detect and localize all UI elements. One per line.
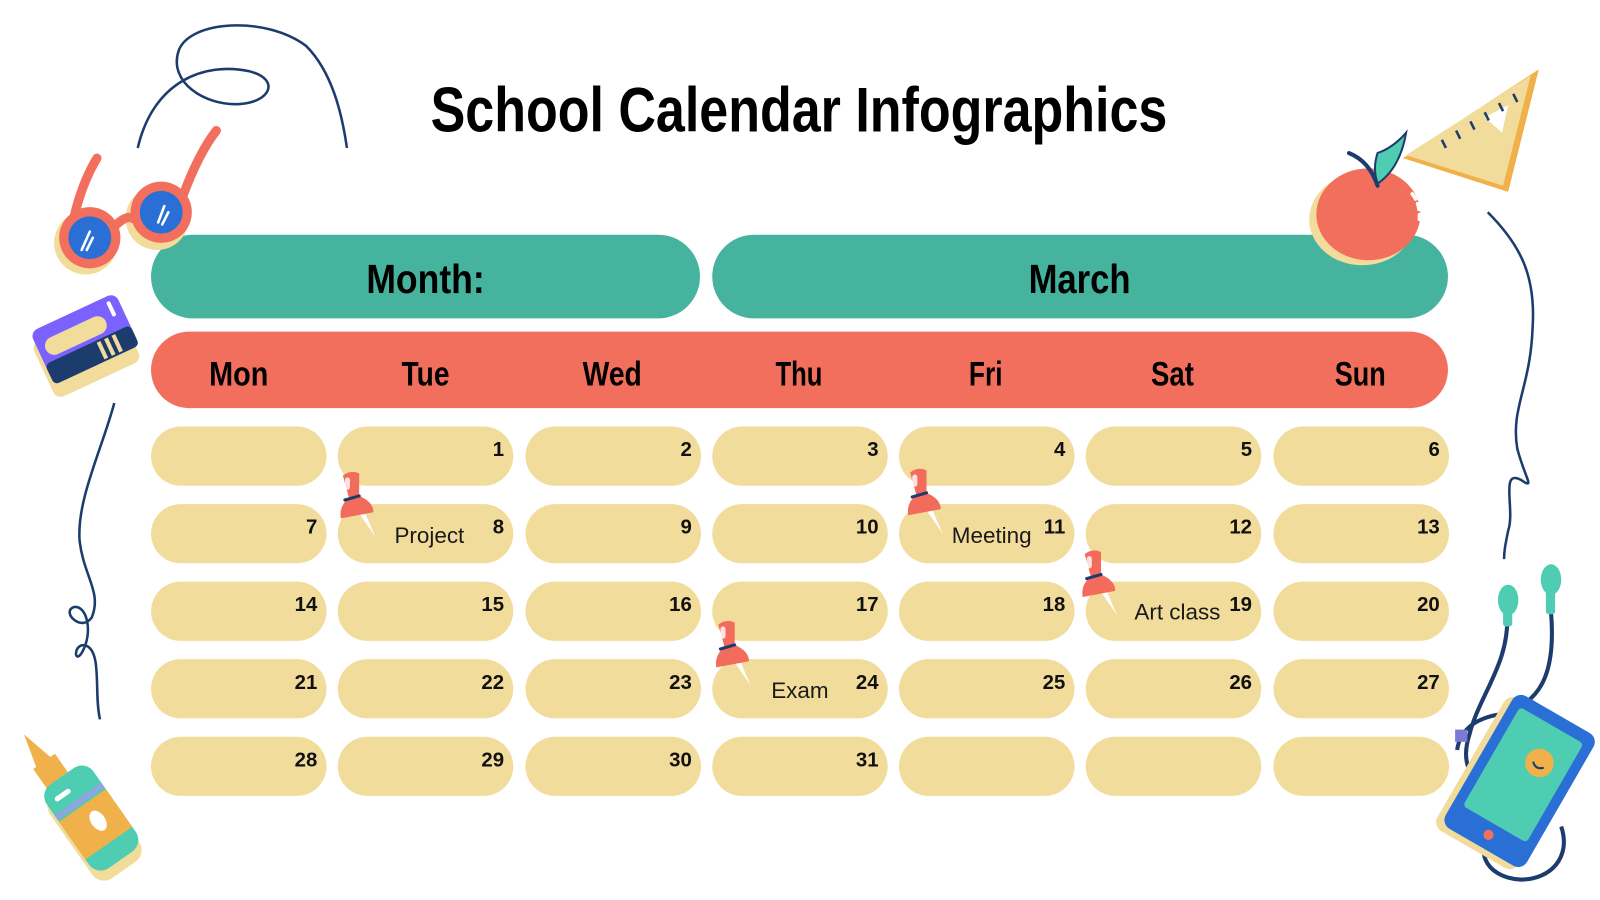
decoration: right curly line (1488, 212, 1533, 559)
weekday header bar: Wed (583, 356, 642, 394)
month name bar (712, 235, 1448, 318)
calendar grid: 29 (481, 749, 504, 771)
calendar grid: 12 (1229, 517, 1252, 539)
month name bar: March (1029, 256, 1131, 302)
month label bar: Month: (366, 256, 485, 302)
calendar grid: 22 (481, 672, 504, 694)
event: Art class: Art class (1134, 599, 1220, 624)
weekday header bar: Mon (209, 356, 268, 394)
calendar grid: 19 (1229, 594, 1252, 616)
calendar grid: 16 (669, 594, 692, 616)
event: Art class (1082, 550, 1220, 624)
icon: sharpener (26, 293, 146, 400)
month label bar (151, 235, 700, 318)
weekday header bar (151, 332, 1448, 408)
title: School Calendar Infographics (431, 76, 1167, 146)
weekday header bar: Fri (969, 356, 1003, 394)
calendar grid: 4 (1054, 439, 1066, 461)
calendar grid: 23 (669, 672, 692, 694)
calendar grid: 10 (856, 517, 879, 539)
decoration: left curly line (70, 403, 114, 719)
calendar grid: 20 (1417, 594, 1440, 616)
calendar grid: 11 (1044, 517, 1065, 539)
event: Exam: Exam (771, 678, 829, 703)
calendar grid: 31 (856, 749, 879, 771)
weekday header bar: Tue (402, 356, 449, 394)
calendar grid: 15 (481, 594, 504, 616)
calendar grid: 13 (1417, 517, 1440, 539)
weekday header bar: Thu (776, 356, 822, 394)
calendar grid (151, 427, 1449, 796)
calendar grid: 2 (680, 439, 692, 461)
calendar grid: 9 (680, 517, 692, 539)
calendar grid: 18 (1043, 594, 1065, 616)
calendar grid: 26 (1229, 672, 1252, 694)
calendar grid: 6 (1428, 439, 1440, 461)
icon: apple and set square (1309, 69, 1539, 265)
event: Project (340, 472, 465, 548)
icon: phone with earphones (1432, 564, 1599, 880)
event: Project: Project (394, 523, 465, 548)
weekday header bar: Sat (1151, 356, 1194, 394)
calendar grid: 27 (1417, 672, 1440, 694)
calendar grid: 7 (306, 517, 317, 539)
decoration: top-left swirl line (138, 25, 347, 148)
weekday header bar: Sun (1335, 356, 1386, 394)
calendar grid: 17 (856, 594, 879, 616)
icon: glasses (54, 131, 216, 274)
calendar grid: 25 (1043, 672, 1065, 694)
calendar grid: 3 (867, 439, 879, 461)
calendar grid: 5 (1241, 439, 1252, 461)
calendar grid: 24 (856, 672, 879, 694)
icon: glue bottle (4, 714, 150, 886)
calendar grid: 8 (493, 517, 504, 539)
event: Meeting: Meeting (952, 523, 1032, 548)
event: Meeting (908, 469, 1032, 548)
calendar grid: 30 (669, 749, 692, 771)
calendar grid: 21 (295, 672, 317, 694)
calendar grid: 28 (295, 749, 317, 771)
calendar grid: 1 (493, 439, 504, 461)
calendar grid: 14 (295, 594, 318, 616)
event: Exam (716, 621, 829, 703)
